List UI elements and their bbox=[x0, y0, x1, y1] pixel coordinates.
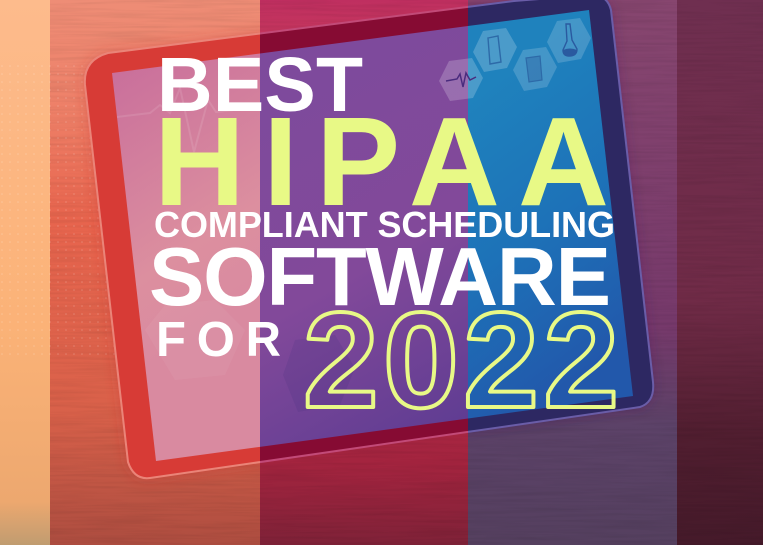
icon: clipboard hexagon bbox=[473, 28, 517, 72]
heading: FOR: FOR bbox=[156, 313, 281, 367]
heading: BEST: BEST bbox=[157, 42, 363, 128]
subheading: COMPLIANT SCHEDULING: COMPLIANT SCHEDULING bbox=[154, 204, 615, 245]
title: stacked headline bbox=[149, 42, 619, 436]
tablet section: blue column bbox=[468, 0, 654, 433]
icon: flask hexagon bbox=[547, 18, 591, 63]
icon: heartbeat hexagon bbox=[439, 58, 483, 101]
heading: SOFTWARE: SOFTWARE bbox=[149, 230, 611, 323]
tablet section: salmon column bbox=[84, 32, 260, 480]
tablet bbox=[85, 0, 653, 478]
screen icons: medical hexagons bbox=[439, 18, 591, 101]
tablet section: crimson column bbox=[260, 6, 468, 464]
heading: outlined 2022: 2022 bbox=[303, 284, 619, 436]
tablet shadow bbox=[85, 0, 653, 478]
icon: beaker hexagon bbox=[513, 47, 557, 91]
heading: HIPAA: HIPAA bbox=[154, 91, 609, 232]
